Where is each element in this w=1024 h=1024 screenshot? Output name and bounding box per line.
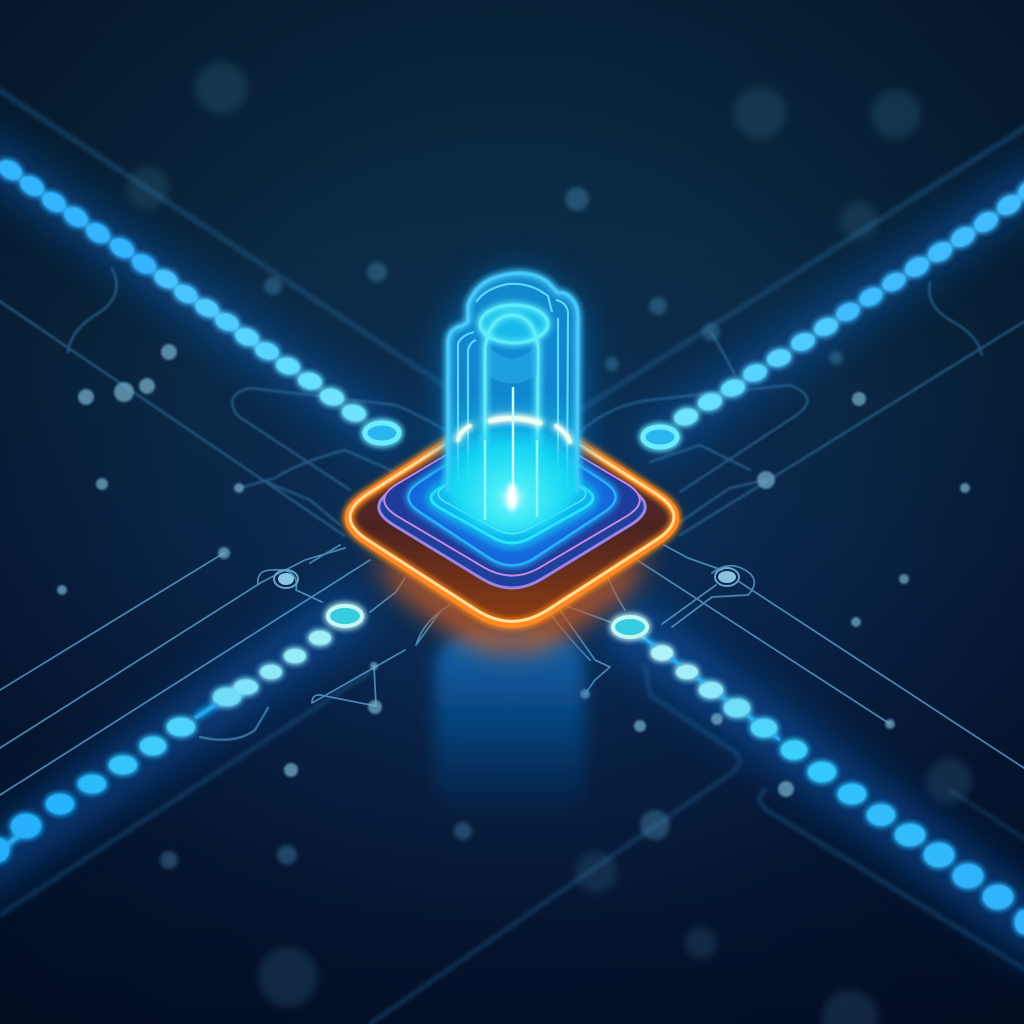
- LED dots lower left: [0, 631, 331, 862]
- cylinder inner fill: [487, 345, 537, 384]
- circuit traces upper left: [0, 268, 445, 536]
- LED ring upper right: [643, 427, 677, 447]
- reflection under platform: [435, 630, 585, 820]
- cyan layer: [431, 453, 593, 543]
- beam glows along the four diagonals: [0, 150, 1024, 935]
- bright white arc: [458, 418, 570, 442]
- LED dots upper right: [673, 176, 1024, 427]
- circuit traces lower left: [0, 545, 450, 795]
- center light line: [512, 387, 514, 508]
- LED dots lower right: [640, 635, 1024, 934]
- column halo: [448, 273, 578, 490]
- circuit traces lower right: [546, 545, 1024, 768]
- orange neon core line: [350, 413, 674, 621]
- ellipse fill: [480, 305, 548, 343]
- LED ring lower left: [328, 606, 362, 626]
- orange under-glow: [372, 545, 652, 652]
- LED ring lower right: [613, 617, 647, 637]
- cyan inner line: [438, 454, 586, 534]
- liquid glow: [444, 412, 580, 532]
- platform: [348, 412, 676, 624]
- inner cylinder: [480, 305, 548, 520]
- column body: [448, 273, 578, 514]
- junction node right: [715, 568, 739, 586]
- inner verticals over liquid: [485, 440, 537, 520]
- orange neon outline glow: [348, 412, 676, 624]
- junction node left: [274, 570, 298, 588]
- indigo layer: [379, 426, 645, 588]
- LED dots upper left: [0, 156, 367, 423]
- pink inner edge: [384, 424, 640, 576]
- inner shell lines: [458, 284, 568, 500]
- blue layer: [408, 429, 616, 565]
- column neon outline: [448, 273, 578, 492]
- glass column: [444, 273, 580, 532]
- core spark: [507, 483, 517, 511]
- outer orange plate: [348, 412, 676, 624]
- circuit traces upper right: [580, 282, 1024, 535]
- LED ring upper left: [365, 423, 399, 443]
